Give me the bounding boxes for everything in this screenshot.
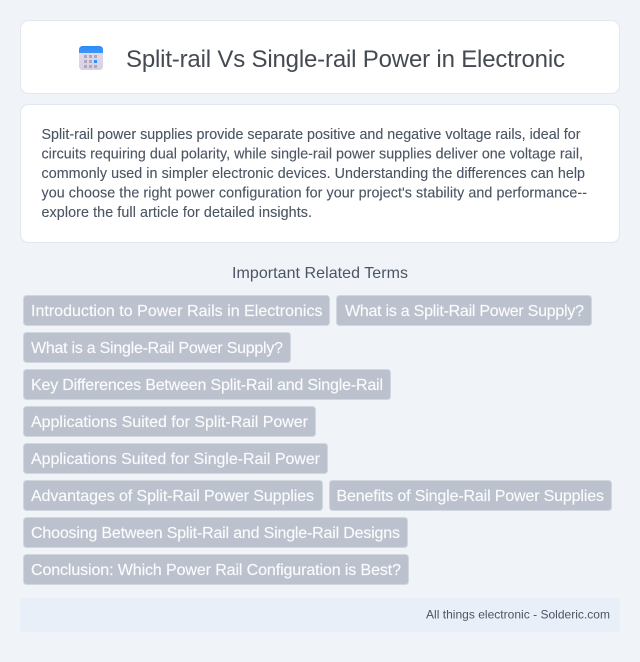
tag: What is a Split-Rail Power Supply? — [345, 303, 584, 320]
heading: related terms: Important Related Terms — [232, 265, 408, 282]
tag list — [24, 296, 612, 584]
panel: header — [20, 20, 620, 94]
description text — [42, 127, 587, 221]
tag — [24, 480, 322, 510]
tag — [24, 370, 390, 400]
panel: description — [20, 104, 620, 242]
tag: Advantages of Split-Rail Power Supplies — [31, 488, 314, 505]
tag: Choosing Between Split-Rail and Single-Rail Designs — [31, 525, 400, 542]
tag — [330, 480, 612, 510]
tag — [24, 406, 316, 436]
tag: What is a Single-Rail Power Supply? — [31, 340, 283, 357]
description text: circuits requiring dual polarity, while single-rail power supplies deliver one voltage rail, — [42, 146, 583, 162]
footer — [20, 598, 620, 632]
icon: calendar — [79, 46, 103, 70]
tag — [24, 332, 290, 362]
tag — [24, 554, 408, 584]
tag — [336, 296, 592, 326]
tag: Key Differences Between Split-Rail and Single-Rail — [31, 377, 383, 394]
description text: you choose the right power configuration for your project's stability and performance-- — [42, 186, 587, 202]
tag — [24, 518, 408, 548]
tag: Applications Suited for Split-Rail Power — [31, 414, 309, 431]
description text: explore the full article for detailed insights. — [42, 205, 312, 221]
tag: Conclusion: Which Power Rail Configuration is Best? — [31, 562, 401, 579]
description text: Split-rail power supplies provide separate positive and negative voltage rails, ideal for — [42, 127, 581, 143]
tag: Benefits of Single-Rail Power Supplies — [336, 488, 604, 505]
description text: commonly used in simpler electronic devices. Understanding the differences can help — [42, 166, 585, 182]
tag: Applications Suited for Single-Rail Power — [31, 451, 321, 468]
title: Split-rail Vs Single-rail Power in Electronic — [126, 46, 565, 73]
tag — [24, 296, 330, 326]
tag: Introduction to Power Rails in Electronics — [31, 303, 322, 320]
footer text: All things electronic - Solderic.com — [426, 608, 610, 622]
tag — [24, 444, 328, 474]
